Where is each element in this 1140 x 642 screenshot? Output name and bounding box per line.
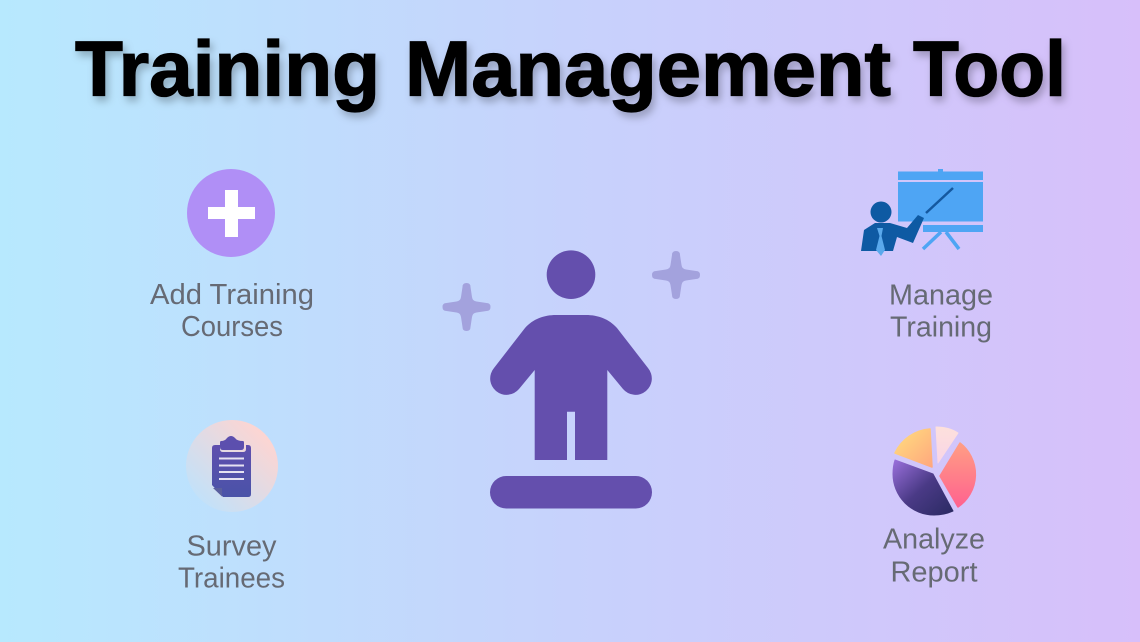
label: manage training: Manage [889,280,993,312]
label: survey trainees: Survey [186,530,277,562]
panel: add training courses [150,169,314,343]
label: manage training: Training [890,312,992,344]
label: add training courses: Courses [181,311,283,343]
panel: central person [442,250,700,508]
label: survey trainees: Trainees [178,562,285,594]
label: add training courses: Add Training [150,279,314,311]
icon: clipboard [186,420,278,512]
title: Management [405,24,891,112]
icon: person head [547,250,595,299]
label: analyze report: Report [890,556,978,588]
icon: plus in circle [187,169,275,257]
icon: presenter at board [861,169,983,256]
icon: sparkle right [652,251,700,299]
title [75,24,1066,112]
title: Training [75,24,380,112]
icon: sparkle left [442,283,490,331]
panel: survey trainees [178,420,285,594]
title: Tool [913,24,1066,112]
icon: pie chart [893,427,975,515]
panel: analyze report [883,427,985,588]
icon: person body [490,315,652,460]
icon: platform [490,476,652,508]
panel: manage training [861,169,993,344]
label: analyze report: Analyze [883,524,985,556]
